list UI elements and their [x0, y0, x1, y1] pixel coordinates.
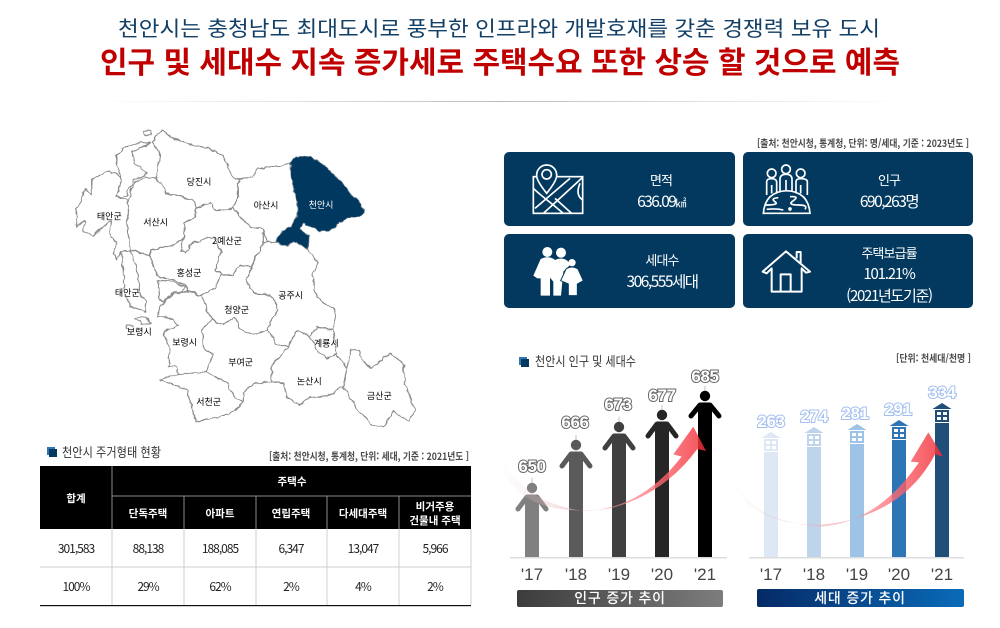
icon: family	[533, 247, 583, 296]
map of Chungnam: 금산군	[367, 389, 392, 402]
panel: population: 690,263명	[860, 190, 918, 212]
map of Chungnam: 서산시	[143, 215, 168, 228]
person 2020	[648, 405, 676, 557]
table: housing types: 다세대주택	[339, 506, 387, 521]
heading: housing types: 천안시 주거형태 현황	[62, 442, 161, 461]
map of Chungnam: 보령시	[127, 325, 152, 338]
region: Cheonan highlighted	[275, 156, 365, 250]
table: housing types: 13,047	[348, 540, 380, 557]
table: housing types: 2%	[427, 578, 444, 595]
table: housing types: 비거주용	[416, 499, 455, 514]
map of Chungnam: 공주시	[278, 288, 303, 301]
map of Chungnam: 당진시	[187, 175, 211, 188]
panel: households: 306,555세대	[627, 270, 698, 292]
person 2019	[605, 417, 633, 557]
source note: housing types: [출처: 천안시청, 통계청, 단위: 세대, 기준 : 2021년도 ]	[269, 448, 469, 463]
map of Chungnam: 보령시	[172, 335, 197, 348]
panel: housing supply ratio	[743, 234, 973, 308]
chart: population pictogram: '21	[694, 565, 716, 584]
table: housing types: 6,347	[278, 540, 305, 557]
chart: household pictogram: 274	[800, 407, 829, 426]
icon: people on globe	[763, 165, 810, 213]
panel: area	[504, 152, 735, 226]
map of Chungnam: 2예산군	[212, 234, 242, 247]
icon: house	[763, 251, 810, 292]
table: housing types: 단독주택	[129, 506, 167, 521]
panel: population: 인구	[878, 170, 901, 189]
arrow: population growth	[500, 427, 706, 511]
panel: population	[743, 152, 973, 226]
subtitle line: 천안시는 충청남도 최대도시로 풍부한 인프라와 개발호재를 갖춘 경쟁력 보유 도시	[118, 13, 880, 43]
chart: household pictogram: 281	[841, 404, 869, 423]
table: housing types: 88,138	[133, 540, 165, 557]
source note: overview: [출처: 천안시청, 통계청, 단위: 명/세대, 기준 : 2023년도 ]	[757, 135, 969, 150]
map of Chungnam	[77, 129, 415, 427]
table: housing types: 5,966	[422, 540, 449, 557]
caption bar: households	[757, 588, 964, 608]
table: housing types: 301,583	[58, 540, 94, 557]
chart: household pictogram	[735, 383, 964, 608]
table: housing types: 아파트	[206, 506, 235, 521]
chart: population pictogram: '19	[608, 565, 630, 584]
table: housing types: 29%	[137, 578, 160, 595]
chart: population pictogram: '20	[651, 565, 673, 584]
chart: household pictogram: '17	[760, 565, 782, 584]
chart: population pictogram: 650	[518, 457, 546, 476]
table: housing types: 주택수	[278, 474, 307, 489]
chart: population pictogram: '17	[521, 565, 543, 584]
map of Chungnam: 서천군	[196, 395, 221, 408]
table: housing types: 62%	[209, 578, 232, 595]
table: housing types: 연립주택	[272, 506, 310, 521]
table: housing types: 건물내 주택	[409, 513, 461, 528]
table: housing types: 4%	[355, 578, 372, 595]
panel: housing supply ratio: (2021년도기준)	[846, 285, 932, 306]
tower 2019	[848, 424, 866, 557]
panel: housing supply ratio: 101.21%	[863, 263, 916, 284]
panel: area: 636.09㎢	[637, 190, 686, 212]
tower 2018	[804, 427, 824, 557]
chart: population pictogram: 673	[604, 395, 632, 414]
chart: household pictogram: 334	[928, 383, 957, 402]
map of Chungnam: 홍성군	[177, 266, 201, 279]
person 2018	[562, 435, 590, 557]
person 2017	[518, 478, 546, 557]
tower 2020	[890, 420, 908, 557]
chart: population pictogram: '18	[565, 565, 587, 584]
map of Chungnam: 부여군	[228, 355, 253, 368]
panel: area: 면적	[650, 170, 672, 189]
chart: household pictogram: '18	[803, 565, 825, 584]
title	[100, 13, 900, 82]
person 2021	[691, 386, 719, 557]
icon: map pin	[533, 165, 583, 213]
table: housing types: 합계	[66, 491, 86, 506]
chart: household pictogram: '21	[931, 565, 953, 584]
chart: population pictogram: 666	[561, 413, 589, 432]
table: housing types	[40, 466, 471, 606]
panel: housing supply ratio: 주택보급률	[861, 243, 918, 262]
table: housing types: 100%	[62, 578, 90, 595]
chart: population pictogram: 677	[648, 386, 676, 405]
chart: household pictogram: 263	[757, 412, 785, 431]
chart: household pictogram: '20	[888, 565, 910, 584]
map of Chungnam: 계룡시	[314, 336, 339, 349]
tower 2017	[762, 432, 780, 557]
table: housing types: 2%	[283, 578, 300, 595]
panel: households	[504, 234, 735, 308]
headline: 인구 및 세대수 지속 증가세로 주택수요 또한 상승 할 것으로 예측	[100, 38, 900, 82]
caption bar: households: 세대 증가 추이	[814, 588, 906, 608]
map of Chungnam: 아산시	[254, 199, 278, 212]
map of Chungnam: 천안시	[309, 198, 333, 211]
tower 2021	[932, 403, 952, 557]
arrow: household growth	[735, 432, 943, 527]
table: housing types: 188,085	[202, 540, 239, 557]
map of Chungnam: 태안군	[97, 209, 122, 222]
map of Chungnam: 태안군	[115, 286, 140, 299]
unit note: [단위: 천세대/천명 ]	[896, 350, 971, 365]
map of Chungnam: 논산시	[297, 374, 322, 387]
panel: households: 세대수	[645, 250, 680, 269]
chart: population pictogram	[500, 367, 727, 608]
chart: household pictogram: 291	[884, 400, 912, 419]
map of Chungnam: 청양군	[224, 303, 249, 316]
chart: population pictogram: 685	[691, 367, 719, 386]
chart: household pictogram: '19	[846, 565, 868, 584]
heading: population and households: 천안시 인구 및 세대수	[535, 351, 636, 370]
caption bar: population	[517, 588, 723, 608]
caption bar: population: 인구 증가 추이	[574, 588, 666, 608]
